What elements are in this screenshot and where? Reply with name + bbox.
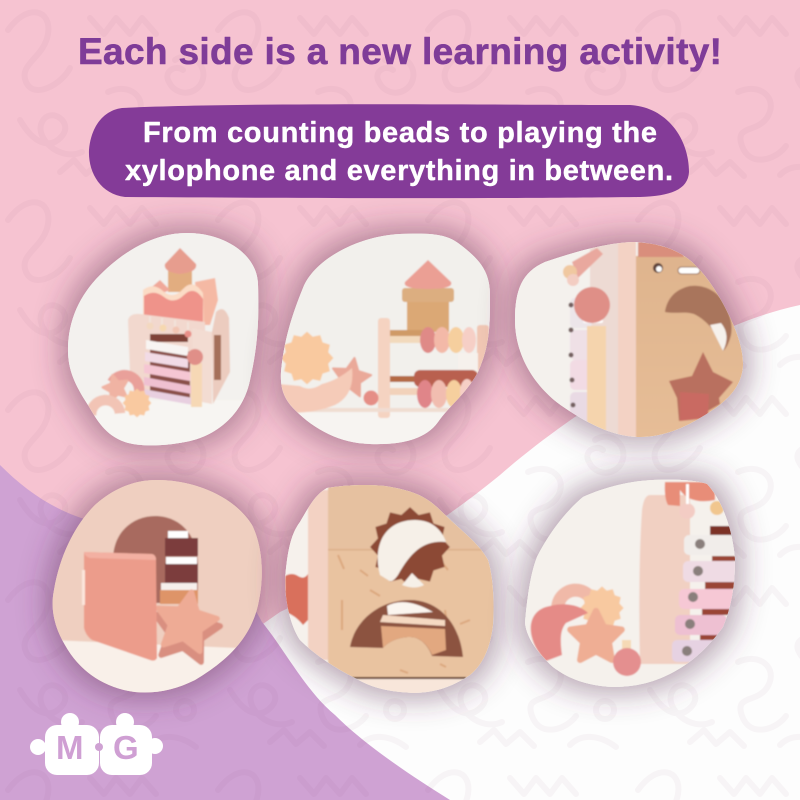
- floor line: [349, 677, 466, 679]
- beads at top: [563, 248, 603, 286]
- pink ball: [613, 640, 641, 676]
- title: Each side is a new learning activity!: [78, 31, 722, 72]
- abacus frame: [312, 318, 489, 418]
- pink door: [82, 552, 157, 661]
- mallet: [187, 349, 203, 407]
- subtitle line 1: From counting beads to playing the: [143, 117, 657, 149]
- arch hole: [350, 600, 463, 657]
- peg hole: [653, 263, 700, 274]
- wooden shapes: [88, 369, 152, 418]
- pink side post: [285, 490, 330, 660]
- xylophone bars: [143, 340, 193, 405]
- star block: [149, 587, 224, 664]
- logo: MG puzzle pieces: [30, 713, 163, 775]
- upper beads: [420, 327, 476, 353]
- abacus tower: [402, 260, 454, 332]
- floor: [62, 640, 236, 692]
- wood face: [328, 484, 498, 678]
- top beads strip: [638, 241, 684, 257]
- logo letter G: G: [113, 729, 139, 766]
- left puzzle piece: [30, 713, 99, 775]
- subtitle pill: [89, 104, 689, 198]
- background: lilac wave: [0, 465, 450, 800]
- panel: door and star close-up: [50, 478, 270, 700]
- wood face: [635, 255, 743, 437]
- background: white wave: [240, 305, 800, 800]
- panel: abacus side: [278, 230, 495, 450]
- xylophone edge: [568, 298, 592, 422]
- logo letter M: M: [56, 729, 84, 766]
- lower beads: [364, 370, 478, 408]
- puzzle join notch: [95, 743, 103, 751]
- moon, sun and star shapes: [278, 332, 374, 413]
- panel: wooden shape sorter side: [280, 480, 500, 700]
- mallet: [574, 287, 610, 436]
- arch opening: [113, 516, 198, 604]
- wooden shapes: [531, 582, 624, 661]
- right puzzle piece: [100, 713, 163, 775]
- subtitle line 2: xylophone and everything in between.: [125, 155, 673, 187]
- toy body: [128, 309, 230, 404]
- star hole: [669, 352, 733, 421]
- toy side panel: [639, 482, 724, 664]
- panel: xylophone and shapes close-up: [520, 478, 740, 693]
- panel: beech wood side with xylophone: [510, 235, 751, 446]
- panel: full toy view: [60, 230, 260, 450]
- xylophone bars: [672, 526, 740, 662]
- toy tower: [143, 248, 218, 328]
- side panel: [590, 240, 636, 440]
- moon hole: [665, 286, 732, 351]
- sun hole: [370, 507, 450, 588]
